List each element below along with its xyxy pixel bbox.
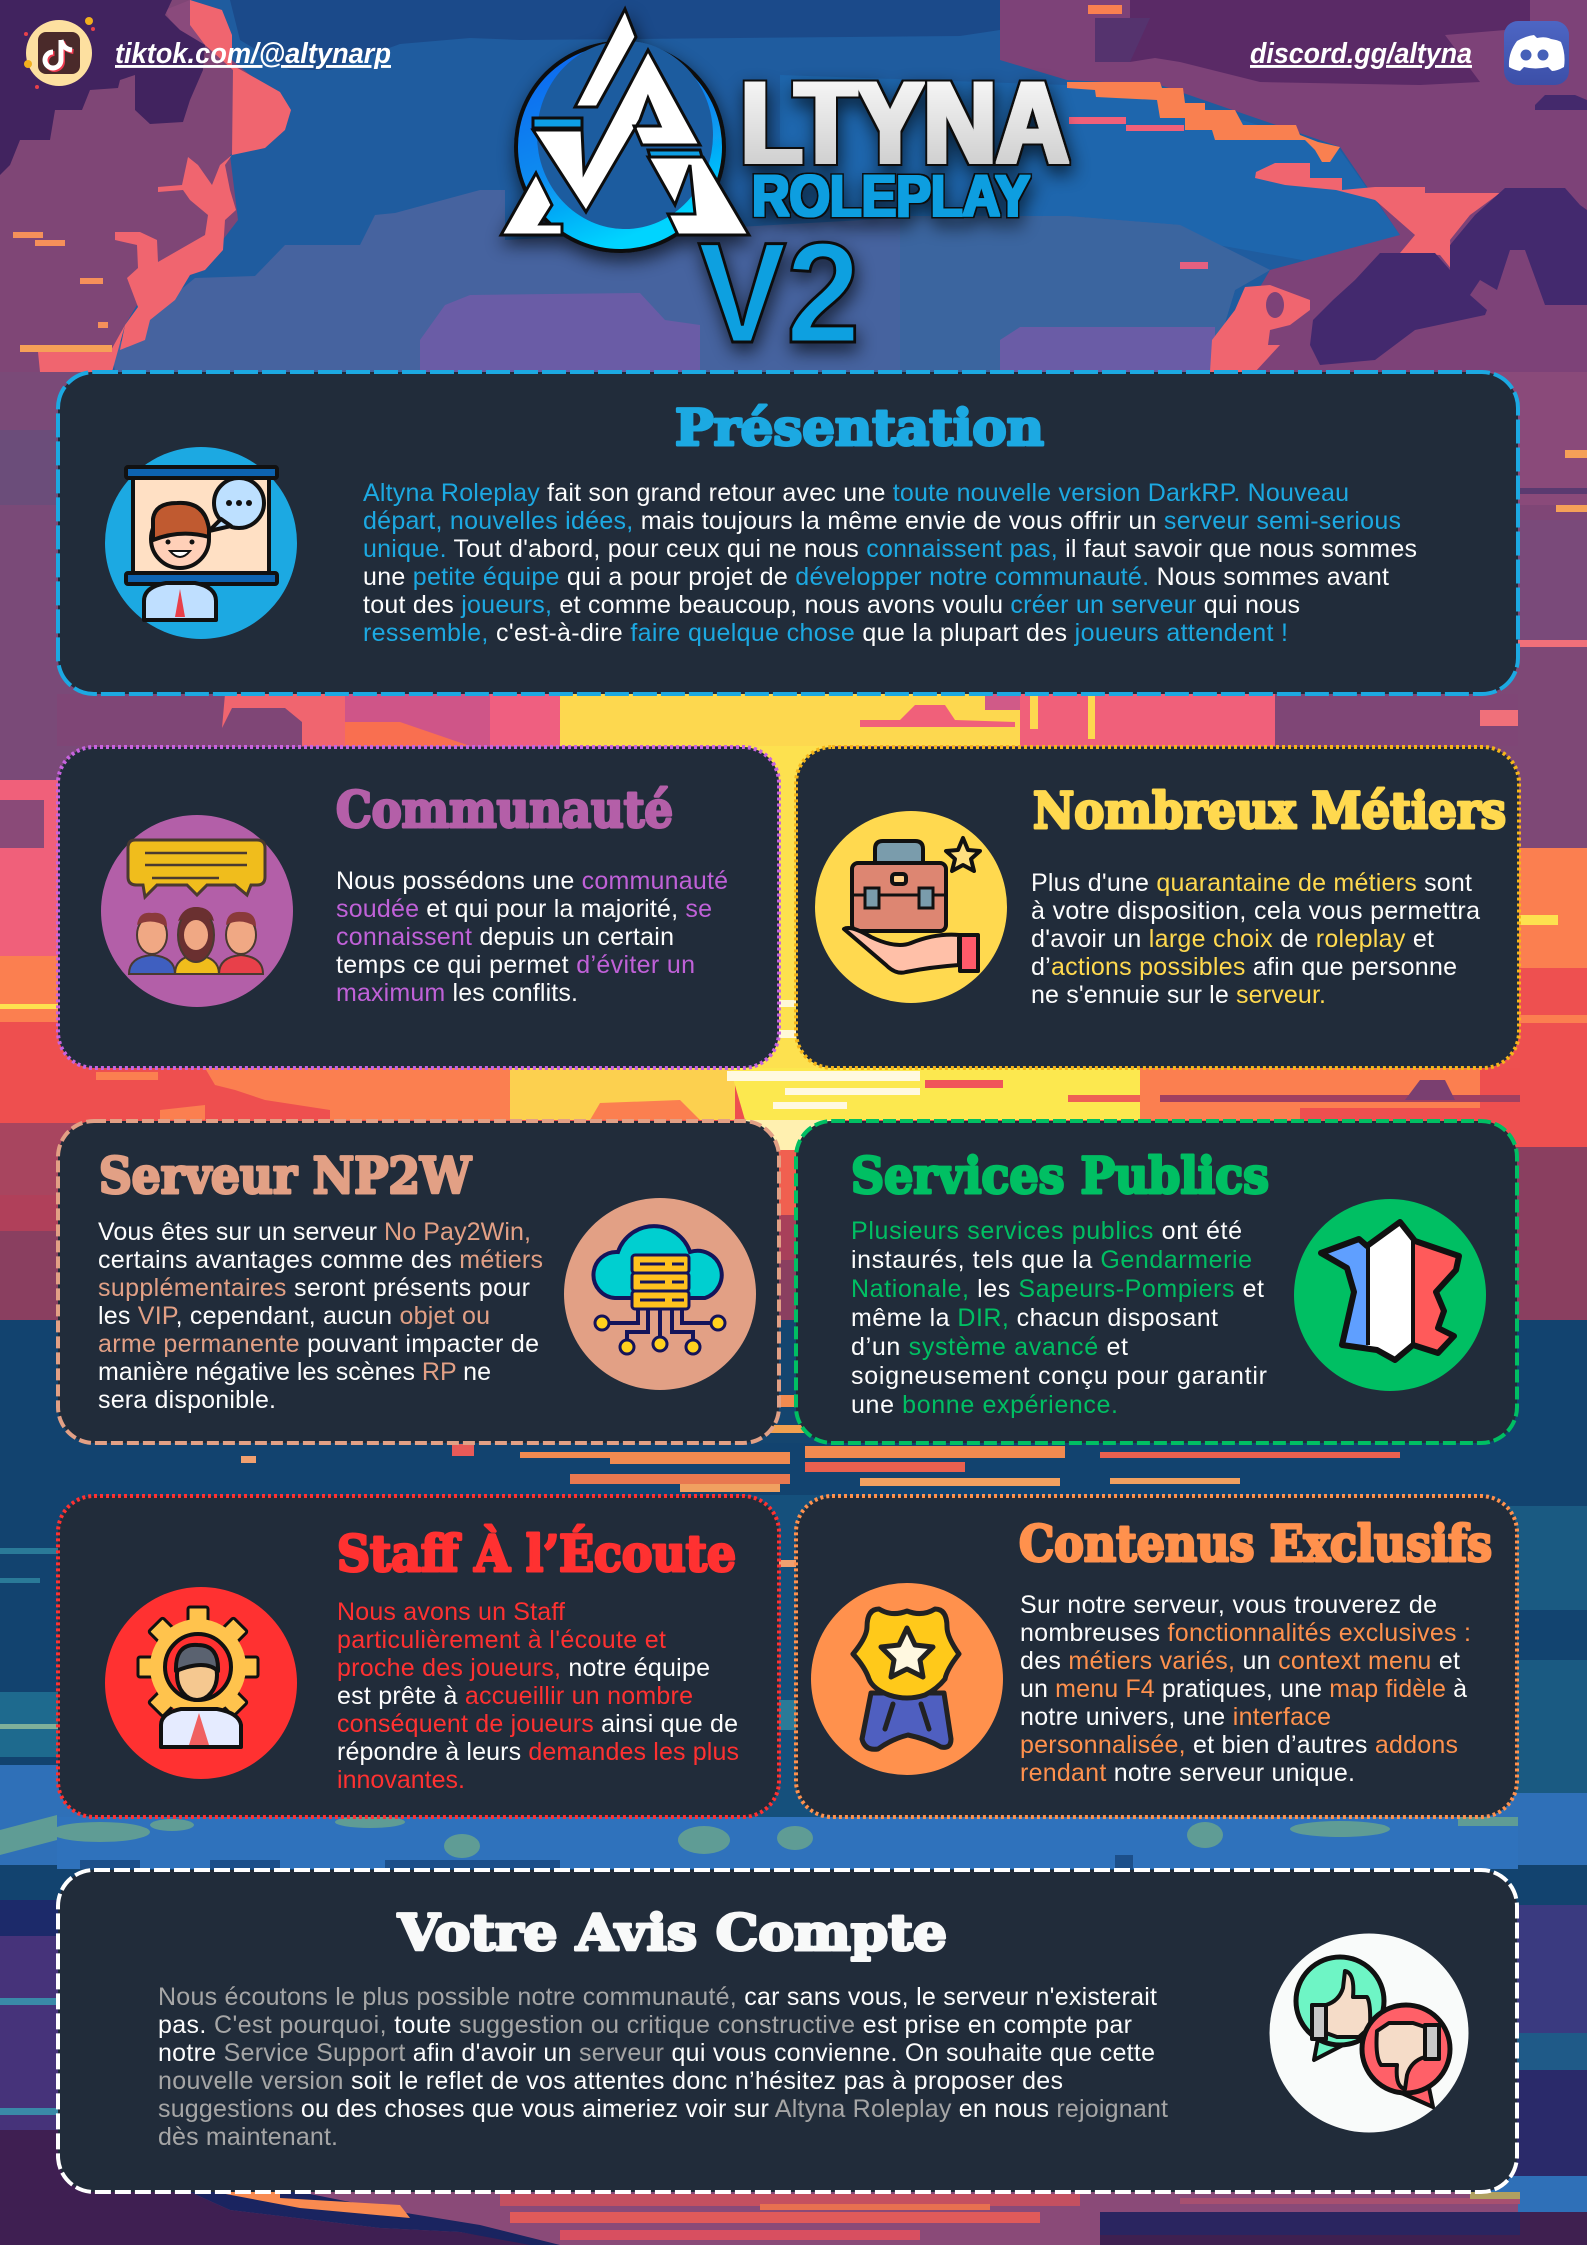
panel: Présentation	[58, 372, 1518, 694]
body text: instaurés, tels que la Gendarmerie	[851, 1246, 1252, 1274]
central vertical gaps	[740, 746, 835, 1076]
body text: particulièrement à l'écoute et	[337, 1626, 666, 1654]
body text: Sur notre serveur, vous trouverez de	[1020, 1591, 1437, 1619]
body text: une petite équipe qui a pour projet de développer notre communauté. Nous sommes avant	[363, 563, 1389, 591]
body text	[337, 1598, 739, 1794]
body text: les VIP, cependant, aucun objet ou	[98, 1302, 490, 1330]
icon: staff member with gear	[105, 1587, 297, 1779]
body text	[1031, 869, 1480, 1009]
body text: répondre à leurs demandes les plus	[337, 1738, 739, 1766]
body text: connaissent depuis un certain	[336, 923, 674, 951]
body text: Nationale, les Sapeurs-Pompiers et	[851, 1275, 1264, 1303]
body text: un menu F4 pratiques, une map fidèle à	[1020, 1675, 1467, 1703]
icon: thumbs up and thumbs down bubbles	[1270, 1934, 1468, 2132]
panel: Contenus Exclusifs	[796, 1496, 1517, 1817]
body text: unique. Tout d'abord, pour ceux qui ne nous connaissent pas, il faut savoir que nous sommes	[363, 535, 1417, 563]
panel: Votre Avis Compte	[58, 1870, 1517, 2192]
body text: Altyna Roleplay fait son grand retour avec une toute nouvelle version DarkRP. Nouveau	[363, 479, 1349, 507]
body text: conséquent de joueurs ainsi que de	[337, 1710, 738, 1738]
body text	[98, 1218, 543, 1414]
body text: innovantes.	[337, 1766, 465, 1794]
heading: Communauté	[336, 780, 673, 839]
logo wordmark ROLEPLAY: ROLEPLAY	[752, 164, 1030, 229]
body text: dès maintenant.	[158, 2123, 338, 2151]
panel box	[796, 1121, 1517, 1443]
panel: Serveur NP2W	[58, 1121, 779, 1443]
panel box	[58, 1496, 779, 1817]
body text: est prête à accueillir un nombre	[337, 1682, 693, 1710]
body text: Nous écoutons le plus possible notre communauté, car sans vous, le serveur n'existerait	[158, 1983, 1157, 2011]
discord link	[1250, 21, 1569, 85]
body text: Vous êtes sur un serveur No Pay2Win,	[98, 1218, 531, 1246]
gap between Présentation and rows	[57, 694, 1518, 746]
body text: une bonne expérience.	[851, 1391, 1118, 1419]
body text: ne s'ennuie sur le serveur.	[1031, 981, 1326, 1009]
body text: arme permanente pouvant impacter de	[98, 1330, 539, 1358]
body text: notre Service Support afin d'avoir un serveur qui vous convienne. On souhaite que cette	[158, 2039, 1155, 2067]
logo V2: V2	[698, 214, 860, 373]
panel: Services Publics	[796, 1121, 1517, 1443]
bottom strip	[57, 2192, 1518, 2245]
panel box	[796, 747, 1519, 1068]
panel: Communauté	[58, 747, 779, 1068]
heading: Contenus Exclusifs	[1019, 1514, 1492, 1573]
icon: map of France	[1294, 1199, 1486, 1391]
discord label: discord.gg/altyna	[1250, 38, 1472, 70]
panel box	[796, 1496, 1517, 1817]
body text: manière négative les scènes RP ne	[98, 1358, 491, 1386]
body text	[158, 1983, 1168, 2151]
body text: départ, nouvelles idées, mais toujours la même envie de vous offrir un serveur semi-serious	[363, 507, 1401, 535]
left margin	[0, 372, 95, 780]
body text: certains avantages comme des métiers	[98, 1246, 543, 1274]
gap row 3-4	[57, 1817, 1518, 1869]
body text	[363, 479, 1417, 647]
panel box	[58, 372, 1518, 694]
body text: d’actions possibles afin que personne	[1031, 953, 1457, 981]
body text: d'avoir un large choix de roleplay et	[1031, 925, 1434, 953]
body text: d’un système avancé et	[851, 1333, 1128, 1361]
body text: tout des joueurs, et comme beaucoup, nous avons voulu créer un serveur qui nous	[363, 591, 1300, 619]
heading: Serveur NP2W	[99, 1146, 472, 1205]
panel: Staff À l'Écoute	[58, 1496, 779, 1817]
body text: proche des joueurs, notre équipe	[337, 1654, 710, 1682]
body text: notre univers, une interface	[1020, 1703, 1331, 1731]
heading: Présentation	[675, 398, 1044, 457]
panel box	[58, 1121, 779, 1443]
body text: sera disponible.	[98, 1386, 276, 1414]
body text: suggestions ou des choses que vous aimeriez voir sur Altyna Roleplay en nous rejoignant	[158, 2095, 1168, 2123]
panel box	[58, 747, 779, 1068]
heading: Services Publics	[851, 1146, 1269, 1205]
body text: des métiers variés, un context menu et	[1020, 1647, 1460, 1675]
body text: maximum les conflits.	[336, 979, 578, 1007]
body text: nouvelle version soit le reflet de vos attentes donc n’hésitez pas à proposer des	[158, 2067, 1063, 2095]
body text	[336, 867, 728, 1007]
body text: personnalisée, et bien d’autres addons	[1020, 1731, 1458, 1759]
gap row 1-2	[57, 1068, 207, 1120]
heading: Staff À l’Écoute	[337, 1524, 736, 1583]
body text: ressemble, c'est-à-dire faire quelque chose que la plupart des joueurs attendent !	[363, 619, 1288, 647]
body text	[851, 1217, 1267, 1419]
logo triangle emblem	[501, 9, 749, 235]
icon: presenter on screen	[105, 447, 297, 639]
tiktok label: tiktok.com/@altynarp	[115, 38, 391, 70]
icon: medal badge	[811, 1583, 1003, 1775]
logo wordmark LTYNA: LTYNA	[741, 57, 1069, 188]
icon: discord	[1504, 21, 1569, 85]
body text: même la DIR, chacun disposant	[851, 1304, 1218, 1332]
body text	[1020, 1591, 1471, 1787]
gap row 2-3	[57, 1443, 1518, 1495]
panel box	[58, 1870, 1517, 2192]
tiktok link	[24, 17, 391, 89]
body text: pas. C'est pourquoi, toute suggestion ou critique constructive est prise en compte par	[158, 2011, 1132, 2039]
logo: Altyna Roleplay V2	[501, 9, 1069, 373]
panel: Nombreux Métiers	[796, 747, 1519, 1068]
right margin	[1480, 372, 1587, 502]
icon: cloud server	[564, 1198, 756, 1390]
body text: Nous avons un Staff	[337, 1598, 565, 1626]
heading: Votre Avis Compte	[397, 1903, 947, 1962]
body text: Plusieurs services publics ont été	[851, 1217, 1242, 1245]
icon: speech bubble and three people	[101, 815, 293, 1007]
body text: temps ce qui permet d’éviter un	[336, 951, 695, 979]
body text: Plus d'une quarantaine de métiers sont	[1031, 869, 1472, 897]
icon: tiktok	[24, 17, 95, 89]
heading: Nombreux Métiers	[1033, 781, 1506, 840]
logo ring	[514, 41, 726, 253]
body text: rendant notre serveur unique.	[1020, 1759, 1355, 1787]
body text: à votre disposition, cela vous permettra	[1031, 897, 1480, 925]
body text: soudée et qui pour la majorité, se	[336, 895, 712, 923]
icon: briefcase in hand	[815, 811, 1007, 1003]
body text: Nous possédons une communauté	[336, 867, 728, 895]
body text: nombreuses fonctionnalités exclusives :	[1020, 1619, 1471, 1647]
body text: supplémentaires seront présents pour	[98, 1274, 530, 1302]
body text: soigneusement conçu pour garantir	[851, 1362, 1267, 1390]
